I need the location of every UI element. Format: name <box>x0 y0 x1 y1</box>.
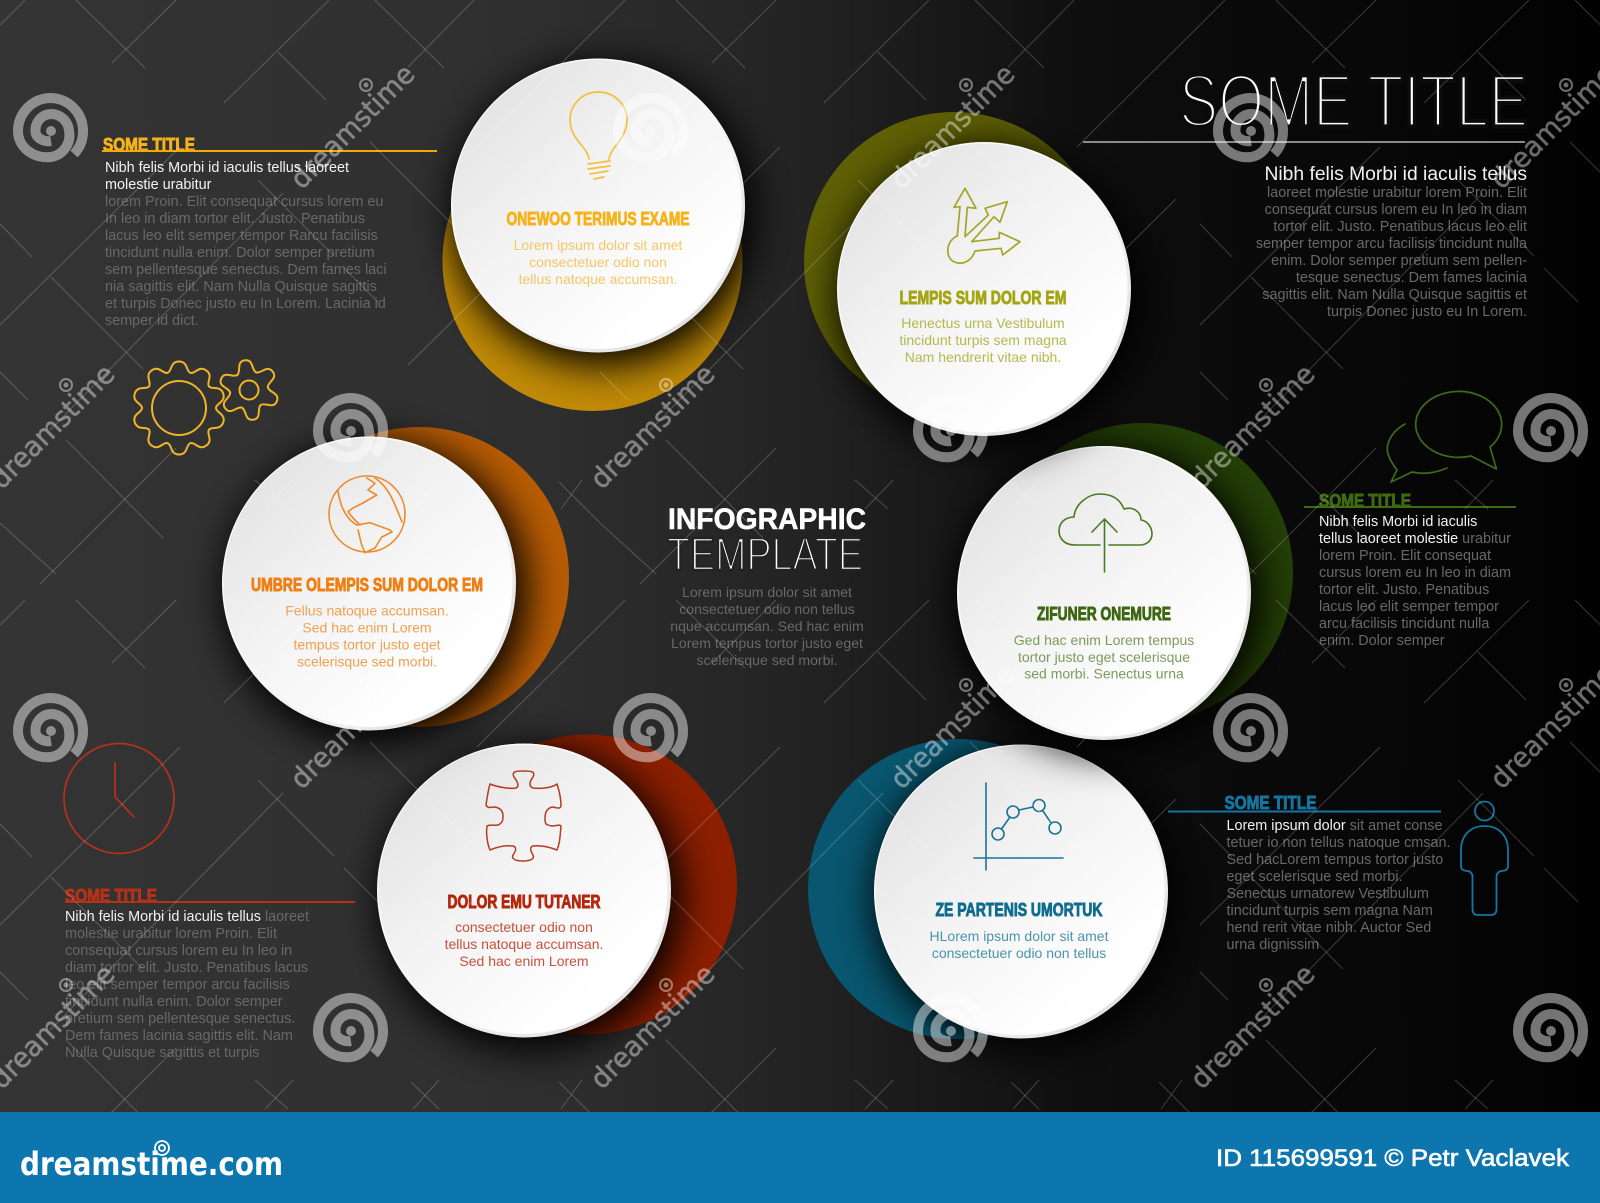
text: orange disc: Sed hac enim Lorem <box>302 619 432 635</box>
text: orange disc <box>285 602 449 669</box>
text: top left body: lacus leo elit semper tempor Rarcu facilisis <box>105 228 378 244</box>
text: bottom left body <box>65 909 309 1061</box>
text: olive disc: tincidunt turpis sem magna <box>899 332 1067 348</box>
text: center body: Lorem ipsum dolor sit amet <box>682 584 852 600</box>
disc: green <box>955 423 1293 753</box>
heading: onewoo: ONEWOO TERIMUS EXAME <box>506 209 690 229</box>
text: bottom left body: pretium sem pellentesque senectus. <box>65 1011 295 1027</box>
text: center body: nque accumsan. Sed hac enim <box>670 618 864 634</box>
text: top right lead: Nibh felis Morbi id iaculis tellus <box>1264 164 1527 185</box>
disc: orange <box>222 427 569 744</box>
footer logo: dreamstime.com <box>20 1145 283 1183</box>
text: top left body: Nibh felis Morbi id iaculis tellus laoreet <box>105 160 349 176</box>
text: top left body: et turpis Donec justo eu In Lorem. Lacinia id <box>105 296 386 312</box>
icon: cloud upload <box>1059 494 1152 572</box>
text: blue disc <box>930 928 1109 961</box>
watermark: dreamstime text: dreamstime <box>583 357 721 495</box>
icon: person <box>1461 802 1508 915</box>
icon: gears <box>131 356 284 454</box>
heading: infographic: INFOGRAPHIC <box>668 503 866 536</box>
text: olive disc: Henectus urna Vestibulum <box>901 315 1065 331</box>
icon: puzzle piece <box>486 771 561 861</box>
text: yellow disc: tellus natoque accumsan. <box>519 271 677 287</box>
heading: umbre: UMBRE OLEMPIS SUM DOLOR EM <box>251 575 483 595</box>
text: red disc: tellus natoque accumsan. <box>445 936 603 952</box>
text: yellow disc: consectetuer odio non <box>529 254 667 270</box>
text: right green body: arcu facilisis tincidunt nulla <box>1319 616 1489 632</box>
text: bottom left body: diam tortor elit. Justo. Penatibus lacus <box>65 960 308 976</box>
panel: bottom left text <box>65 886 355 1061</box>
disc: red <box>377 734 737 1051</box>
watermark: dreamstime text: dreamstime <box>283 57 421 195</box>
text: bottom left body: molestie urabitur lorem Proin. Elit <box>65 926 277 942</box>
heading: lempis: LEMPIS SUM DOLOR EM <box>900 288 1066 308</box>
watermark: dreamstime text: dreamstime <box>1183 957 1321 1095</box>
text: center body <box>670 584 864 668</box>
text: red disc: consectetuer odio non <box>455 919 593 935</box>
icon: line chart <box>974 783 1063 870</box>
panel: right green text <box>1304 491 1516 649</box>
text: bottom left body: Nulla Quisque sagittis et turpis <box>65 1045 259 1061</box>
text: right blue body: hend rerit vitae nibh. Auctor Sed <box>1226 920 1431 936</box>
heading: ze partenis: ZE PARTENIS UMORTUK <box>936 900 1102 920</box>
text: right blue body: urna dignissim <box>1226 937 1319 953</box>
text: right blue body: Lorem ipsum dolor sit amet conse <box>1226 818 1442 834</box>
text: top left body: lorem Proin. Elit consequat cursus lorem eu <box>105 194 383 210</box>
text: orange disc: tempus tortor justo eget <box>293 636 441 652</box>
text: top left body: tincidunt nulla enim. Dolor semper pretium <box>105 245 375 261</box>
text: top left body <box>105 160 387 329</box>
text: top right body: laoreet molestie urabitur lorem Proin. Elit <box>1267 185 1527 201</box>
text: center body: consectetuer odio non tellus <box>679 601 855 617</box>
text: olive disc: Nam hendrerit vitae nibh. <box>905 349 1061 365</box>
heading: zifuner: ZIFUNER ONEMURE <box>1037 604 1171 624</box>
heading: dolor emu: DOLOR EMU TUTANER <box>448 892 600 912</box>
disc: yellow <box>442 58 755 411</box>
text: blue disc: consectetuer odio non tellus <box>932 945 1106 961</box>
text: top right body <box>1256 185 1527 320</box>
heading: top left: SOME TITLE <box>103 135 195 155</box>
text: red disc <box>445 919 603 969</box>
text: green disc: sed morbi. Senectus urna <box>1024 666 1184 682</box>
center title <box>667 503 866 668</box>
icon: speech bubbles <box>1387 391 1502 482</box>
text: top left body: sem pellentesque senectus. Dem fames laci <box>105 262 387 278</box>
panel: top left text <box>102 135 437 329</box>
text: right blue body: Sed hacLorem tempus tortor justo <box>1226 852 1443 868</box>
watermark: dreamstime text: dreamstime <box>883 57 1021 195</box>
text: olive disc <box>899 315 1067 365</box>
text: green disc: Ged hac enim Lorem tempus <box>1014 632 1194 648</box>
watermark: spirals <box>18 98 1583 1057</box>
text: right blue body: tincidunt turpis sem magna Nam <box>1226 903 1433 919</box>
text: top left body: semper id dict. <box>105 313 199 329</box>
text: orange disc: scelerisque sed morbi. <box>297 653 437 669</box>
text: bottom left body: consequat cursus lorem eu In leo in <box>65 943 292 959</box>
panel: right blue text <box>1168 793 1450 953</box>
text: right blue body: eget scelerisque sed morbi. <box>1226 869 1402 885</box>
heading: right blue: SOME TITLE <box>1224 793 1316 813</box>
heading: template: TEMPLATE <box>667 528 863 580</box>
footer bar <box>0 1112 1600 1203</box>
text: right green body: tellus laoreet molestie urabitur <box>1319 531 1511 547</box>
text: right green body: enim. Dolor semper <box>1319 633 1445 649</box>
watermark: dreamstime text: dreamstime <box>883 657 1021 795</box>
text: top left body: nia sagittis elit. Nam Nulla Quisque sagittis <box>105 279 377 295</box>
text: top right body: tesque senectus. Dem fames lacinia <box>1296 270 1527 286</box>
text: yellow disc: Lorem ipsum dolor sit amet <box>514 237 683 253</box>
text: bottom left body: leo elit semper tempor arcu facilisis <box>65 977 290 993</box>
icon: footer spiral <box>155 1141 169 1155</box>
footer credit: ID 115699591 © Petr Vaclavek <box>1216 1145 1570 1172</box>
text: bottom left body: tincidunt nulla enim. Dolor semper <box>65 994 283 1010</box>
text: right green body: lacus leo elit semper tempor <box>1319 599 1499 615</box>
text: top right body: enim. Dolor semper pretium sem pellen- <box>1271 253 1527 269</box>
text: yellow disc <box>514 237 683 287</box>
text: top right body: turpis Donec justo eu In Lorem. <box>1327 304 1527 320</box>
text: top right body: consequat cursus lorem eu In leo in diam <box>1265 202 1527 218</box>
text: green disc: tortor justo eget scelerisque <box>1018 649 1190 665</box>
watermark: dreamstime text: dreamstime <box>283 657 421 795</box>
text: bottom left body: Dem fames lacinia sagittis elit. Nam <box>65 1028 293 1044</box>
text: bottom left body: Nibh felis Morbi id iaculis tellus laoreet <box>65 909 309 925</box>
text: right blue body: tetuer io non tellus natoque cmsan. <box>1226 835 1450 851</box>
watermark: dreamstime text: dreamstime <box>1183 357 1321 495</box>
icon: globe <box>329 476 405 553</box>
disc: blue <box>808 739 1179 1051</box>
text: right blue body: Senectus urnatorew Vestibulum <box>1226 886 1429 902</box>
disc: olive <box>804 112 1142 450</box>
text: top left body: molestie urabitur <box>105 177 212 193</box>
panel: top right title <box>1083 60 1528 320</box>
text: blue disc: HLorem ipsum dolor sit amet <box>930 928 1109 944</box>
heading: right green: SOME TITLE <box>1319 491 1411 511</box>
text: top left body: In leo in diam tortor elit. Justo. Penatibus <box>105 211 365 227</box>
text: top right body: tortor elit. Justo. Penatibus lacus leo elit <box>1273 219 1527 235</box>
text: top right body: semper tempor arcu facilisis tincidunt nulla <box>1256 236 1527 252</box>
text: right green body: cursus lorem eu In leo in diam <box>1319 565 1511 581</box>
text: top right body: sagittis elit. Nam Nulla Quisque sagittis et <box>1262 287 1527 303</box>
icon: arrows <box>948 188 1020 263</box>
text: right green body: lorem Proin. Elit consequat <box>1319 548 1491 564</box>
text: red disc: Sed hac enim Lorem <box>459 953 589 969</box>
text: center body: Lorem tempus tortor justo eget <box>671 635 863 651</box>
heading: bottom left: SOME TITLE <box>65 886 157 906</box>
text: right green body: Nibh felis Morbi id iaculis <box>1319 514 1477 530</box>
text: green disc <box>1014 632 1194 682</box>
text: right green body: tortor elit. Justo. Penatibus <box>1319 582 1489 598</box>
icon: clock <box>64 744 174 854</box>
text: orange disc: Fellus natoque accumsan. <box>285 602 449 618</box>
text: center body: scelerisque sed morbi. <box>696 652 838 668</box>
text: right blue body <box>1226 818 1450 953</box>
text: right green body <box>1319 514 1511 649</box>
watermark: dreamstime text: dreamstime <box>583 957 721 1095</box>
icon: lightbulb <box>570 92 627 179</box>
